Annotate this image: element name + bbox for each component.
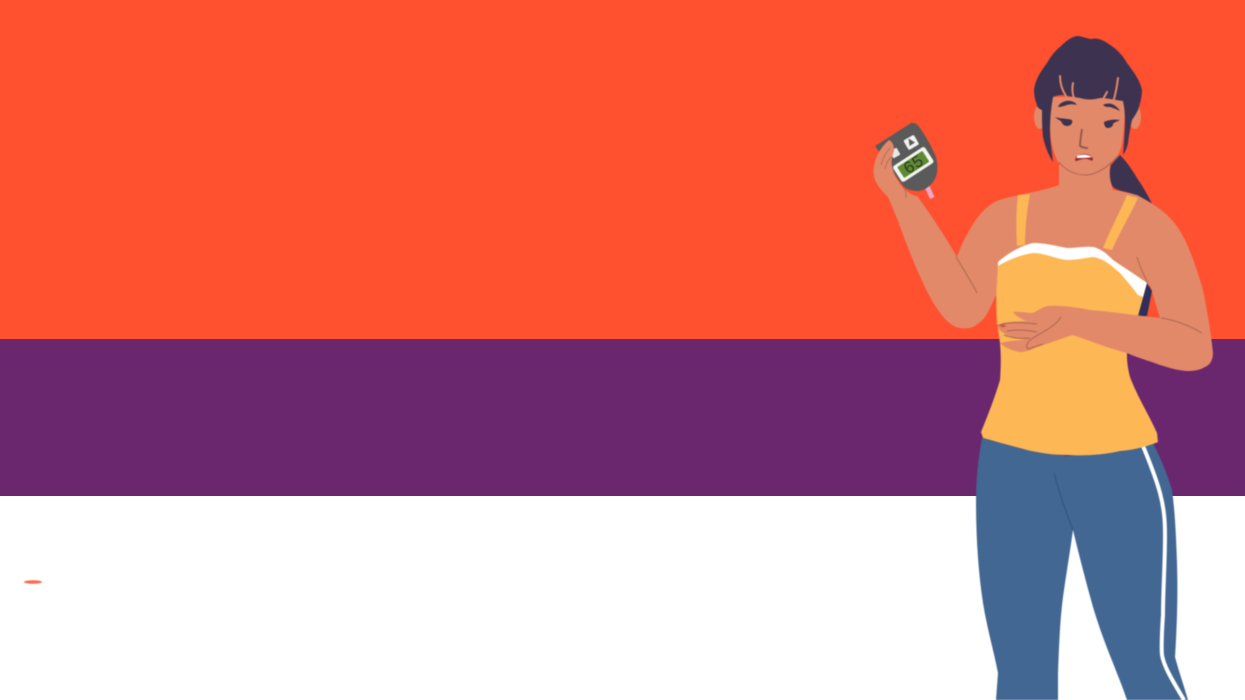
hair [1034,36,1142,162]
reading: 65 [901,153,928,180]
figure: woman checking glucose [874,36,1213,700]
panel: white band [0,496,1245,700]
forearm and lower hand [997,306,1190,365]
skin fold lines [956,257,1202,349]
ponytail [1110,155,1152,204]
chin line [1059,156,1118,175]
red fingernail [1000,325,1006,327]
mouth [1075,154,1093,161]
hand holding meter [874,140,917,197]
meter screen [892,146,934,183]
eyes [1055,117,1072,126]
torso and right arm skin [957,165,1193,320]
eyebrows [1058,101,1077,107]
neck and face [1050,97,1126,175]
pants crease [1054,473,1073,530]
test strip [925,186,934,199]
meter body [875,123,937,191]
yellow top [981,243,1158,455]
armpit gap [1142,285,1160,318]
white neckline band [998,243,1147,297]
dark back strap [1138,283,1152,316]
pants [976,438,1188,700]
left button [890,148,900,158]
glucose meter [875,123,937,199]
yellow top straps [1016,194,1030,246]
hair strands [1060,76,1118,99]
upper arm [1140,205,1213,371]
hand fold lines [881,148,906,198]
raised arm [888,196,1000,328]
button arrow [908,138,915,146]
meter button [903,135,919,150]
screen display [897,151,929,178]
panel: orange band [0,0,1245,339]
small red mark [24,580,42,584]
panel: purple band [0,339,1245,496]
face features [1055,101,1120,161]
ears [1034,105,1141,129]
nose [1080,129,1088,148]
pants stripe [1143,446,1184,700]
